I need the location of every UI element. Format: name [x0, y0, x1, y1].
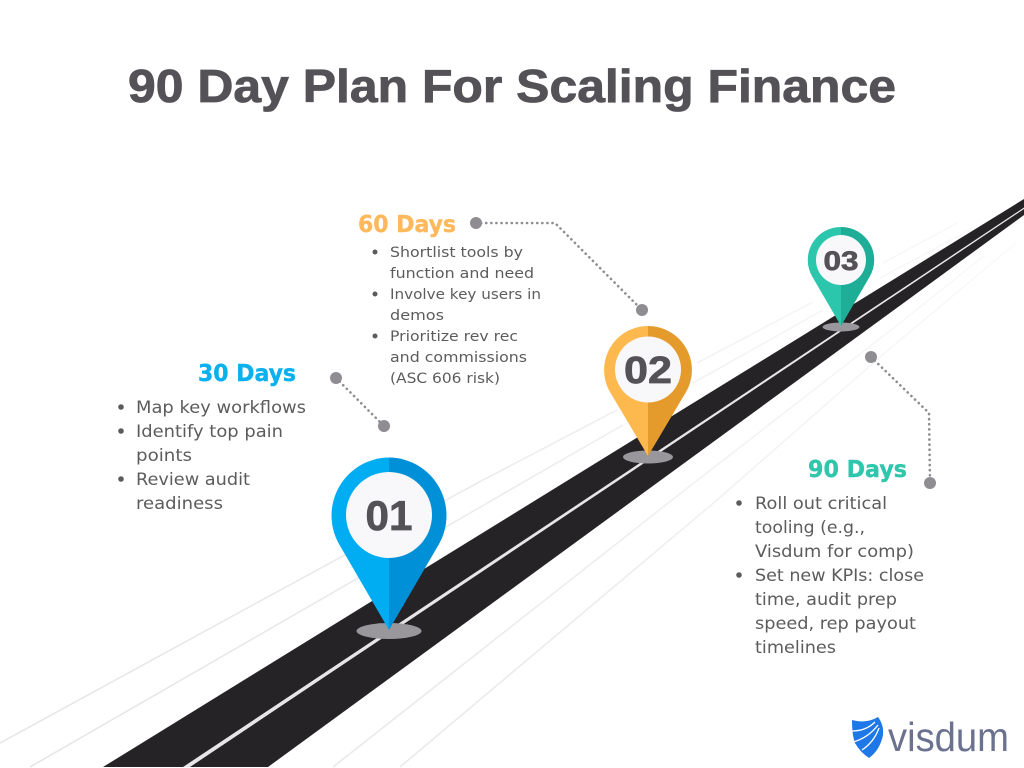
text block: 90 Days: Roll out critical — [755, 494, 887, 514]
pin 02: 02 — [624, 350, 672, 392]
heading: 60 Days: 60 Days — [358, 212, 456, 238]
pin 01 — [332, 458, 446, 639]
heading: 30 Days: 30 Days — [198, 361, 296, 387]
pin 01: 01 — [366, 492, 412, 539]
text block: 90 Days: time, audit prep — [755, 590, 897, 610]
text block: 90 Days: Set new KPIs: close — [755, 566, 924, 586]
text block: 90 Days — [736, 494, 924, 658]
text block: 90 Days: Visdum for comp) — [755, 542, 914, 562]
text block: 60 Days: and commissions — [390, 350, 527, 366]
text block: 60 Days: function and need — [390, 266, 534, 282]
text block: 30 Days: Map key workflows — [136, 398, 306, 418]
title: 90 Day Plan For Scaling Finance — [128, 60, 896, 112]
pin 03: 03 — [824, 246, 858, 276]
text block: 60 Days: (ASC 606 risk) — [390, 371, 500, 387]
text block: 30 Days — [118, 398, 306, 514]
heading: 90 Days: 90 Days — [808, 457, 907, 483]
text block: 30 Days: Review audit — [136, 470, 250, 490]
pin 02 — [604, 326, 692, 464]
text block: 30 Days: readiness — [136, 494, 223, 514]
text block: 60 Days — [372, 245, 541, 387]
pin 03 — [808, 227, 874, 332]
connector: 30 days — [330, 372, 390, 432]
text block: 90 Days: timelines — [755, 638, 836, 658]
text block: 30 Days: Identify top pain — [136, 422, 283, 442]
text block: 30 Days: points — [136, 446, 192, 466]
text block: 90 Days: tooling (e.g., — [755, 518, 865, 538]
connector: 60 days — [470, 217, 648, 316]
text block: 90 Days: speed, rep payout — [755, 614, 916, 634]
text block: 60 Days: Involve key users in — [390, 287, 541, 303]
logo: visdum: visdum — [888, 714, 1009, 760]
text block: 60 Days: Prioritize rev rec — [390, 329, 518, 345]
road — [103, 199, 1024, 767]
text block: 60 Days: demos — [390, 308, 444, 324]
text block: 60 Days: Shortlist tools by — [390, 245, 523, 261]
connector: 90 days — [865, 351, 936, 489]
